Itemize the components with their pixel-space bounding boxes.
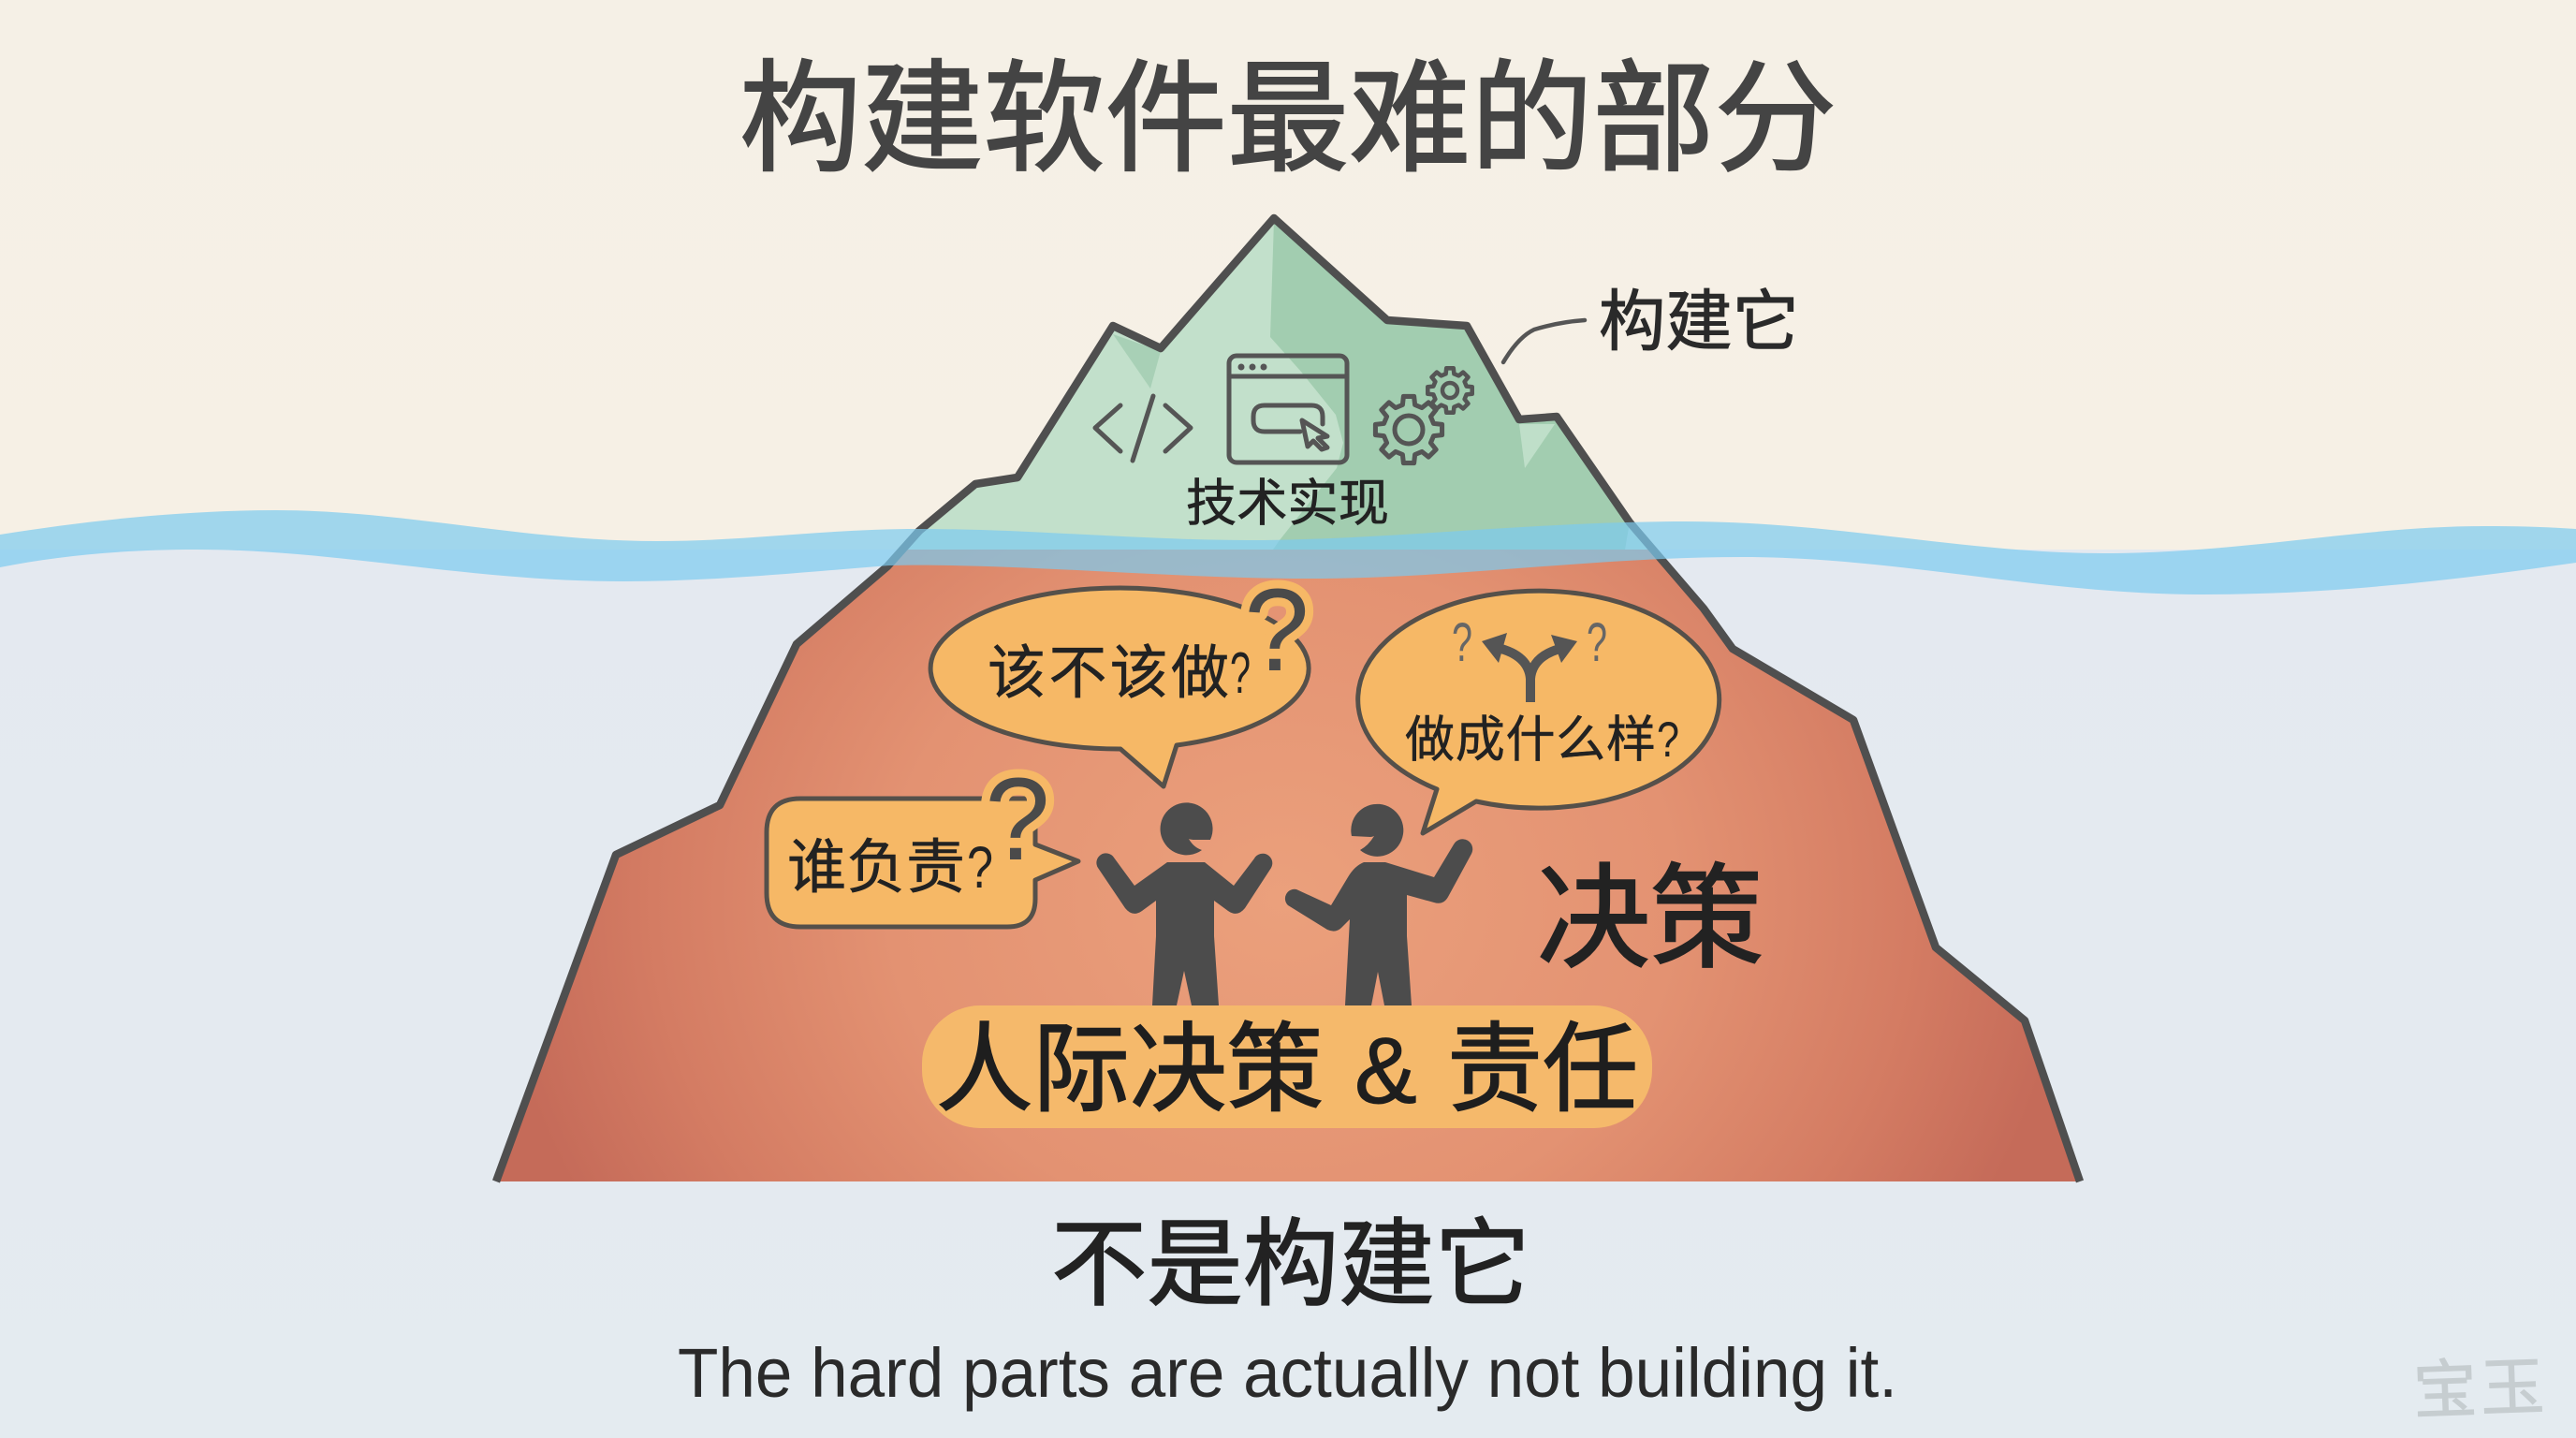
speech bubble: what should it look like: ? <box>1657 712 1679 768</box>
speech bubble: what should it look like: ? <box>1587 612 1607 673</box>
speech bubble: should we do it <box>930 565 1310 786</box>
speech bubble: should we do it: ? <box>1244 565 1310 696</box>
pill: interpersonal decisions and responsibility: & <box>1354 1019 1417 1123</box>
watermark: 宝玉 <box>2412 1352 2545 1427</box>
label line: build it <box>1503 320 1585 362</box>
heading: not building it: 不是构建它 <box>1051 1211 1530 1318</box>
speech bubble: who is responsible: ? <box>985 755 1050 885</box>
speech bubble: what should it look like: 做成什么样 <box>1405 712 1656 768</box>
speech bubble: should we do it: 该不该做 <box>988 641 1229 706</box>
pill: interpersonal decisions and responsibility: 责任 <box>1447 1016 1638 1124</box>
background: sky <box>0 0 2576 550</box>
label: decisions: 决策 <box>1537 855 1764 982</box>
icon: gears <box>1375 368 1472 463</box>
icon: code brackets <box>1095 396 1191 461</box>
background: sea <box>0 550 2576 1438</box>
label: build it: 构建它 <box>1599 286 1799 360</box>
pill: interpersonal decisions and responsibility: 人际决策 <box>936 1016 1324 1124</box>
figure: person left <box>1096 802 1272 1005</box>
speech bubble: should we do it: ? <box>1230 641 1251 706</box>
title: 构建软件最难的部分 <box>739 51 1837 187</box>
subtitle: The hard parts are actually not building it. <box>678 1334 1897 1412</box>
pill: interpersonal decisions and responsibility <box>922 1005 1652 1128</box>
iceberg body: underwater decisions <box>500 550 2076 1181</box>
icon: browser window with cursor <box>1229 356 1347 462</box>
speech bubble: who is responsible <box>767 755 1078 927</box>
figure: person right <box>1285 804 1472 1005</box>
speech bubble: who is responsible: ? <box>967 835 993 901</box>
iceberg tip: technical implementation <box>908 225 1647 550</box>
speech bubble: what should it look like <box>1358 591 1720 833</box>
iceberg outline <box>496 218 2080 1181</box>
speech bubble: what should it look like: ? <box>1452 612 1472 673</box>
water band <box>0 510 2576 594</box>
speech bubble: who is responsible: 谁负责 <box>787 835 965 901</box>
label: technical implementation: 技术实现 <box>1186 476 1389 532</box>
